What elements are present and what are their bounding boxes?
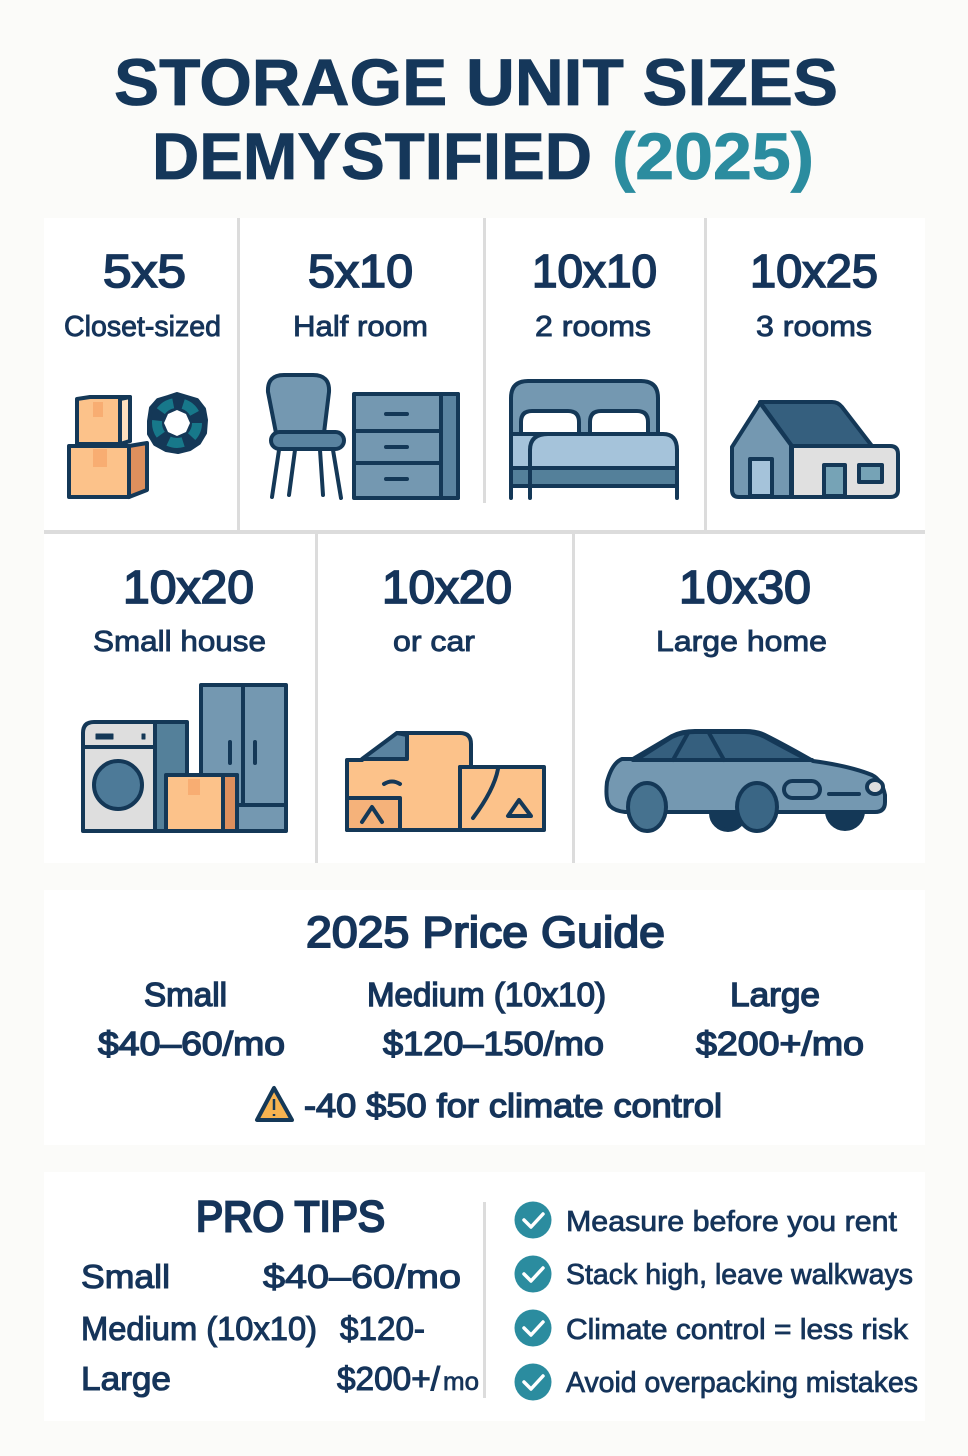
- 10x30 label: [656, 561, 827, 658]
- 10x30 label: 10x30: [679, 561, 811, 613]
- large price: $200+/mo: [696, 1025, 864, 1062]
- 10x10 label: 2 rooms: [535, 311, 651, 343]
- 10x10 label: 10x10: [532, 245, 657, 297]
- small price: [98, 976, 285, 1062]
- icon: car: [606, 731, 885, 831]
- panel: pro tips: [44, 1172, 925, 1421]
- 10x25 label: 3 rooms: [756, 311, 872, 343]
- icon: large boxes: [347, 733, 544, 830]
- tips price table: Small: [81, 1258, 170, 1295]
- icon: bed: [511, 381, 677, 498]
- icon: washer, wardrobe and box: [83, 685, 286, 831]
- 10x20 car label: or car: [393, 626, 475, 658]
- medium price: [367, 976, 606, 1062]
- 10x20 car label: [382, 561, 512, 658]
- tips price table: $200+/: [337, 1360, 441, 1397]
- tips price table: mo: [443, 1368, 479, 1396]
- tips price table: $120-: [340, 1310, 425, 1347]
- icon: boxes and wreath: [69, 394, 206, 497]
- title: (2025): [612, 119, 814, 193]
- 10x20 small house label: 10x20: [123, 561, 254, 613]
- medium price: $120–150/mo: [383, 1025, 604, 1062]
- 5x5 label: 5x5: [103, 245, 186, 297]
- title: [114, 45, 838, 193]
- tips price table: Medium (10x10): [81, 1310, 317, 1347]
- 5x10 label: [293, 245, 428, 343]
- icon: warning: [257, 1088, 292, 1120]
- title: DEMYSTIFIED: [152, 119, 592, 193]
- panel: top row unit sizes: [44, 218, 925, 534]
- tips price table: [81, 1258, 479, 1397]
- 10x25 label: 10x25: [750, 245, 878, 297]
- tip: stack: Stack high, leave walkways: [566, 1259, 913, 1291]
- tip: climate: Climate control = less risk: [566, 1314, 909, 1346]
- tips price table: $40–60/mo: [263, 1258, 461, 1295]
- large price: Large: [730, 976, 820, 1013]
- 5x10 label: Half room: [293, 311, 428, 343]
- medium price: Medium (10x10): [367, 976, 606, 1013]
- small price: $40–60/mo: [98, 1025, 285, 1062]
- panel: 2025 price guide: [44, 890, 925, 1145]
- panel: second row unit sizes: [44, 534, 925, 863]
- tip: overpacking: Avoid overpacking mistakes: [566, 1367, 918, 1399]
- price guide heading: 2025 Price Guide: [306, 908, 665, 957]
- 10x10 label: [532, 245, 657, 343]
- 10x20 car label: 10x20: [382, 561, 512, 613]
- 10x25 label: [750, 245, 878, 343]
- small price: Small: [144, 976, 227, 1013]
- 10x20 small house label: Small house: [93, 626, 266, 658]
- 5x5 label: [64, 245, 221, 343]
- large price: [696, 976, 864, 1062]
- tips price table: Large: [81, 1360, 171, 1397]
- 10x20 small house label: [93, 561, 266, 658]
- tip: measure: Measure before you rent: [566, 1206, 897, 1238]
- 5x5 label: Closet-sized: [64, 311, 221, 343]
- title: STORAGE UNIT SIZES: [114, 45, 838, 119]
- icon: house: [732, 402, 898, 497]
- icon: chair and dresser: [268, 375, 458, 498]
- climate control note: -40 $50 for climate control: [304, 1087, 722, 1124]
- 10x30 label: Large home: [656, 626, 827, 658]
- 5x10 label: 5x10: [308, 245, 413, 297]
- pro tips heading: PRO TIPS: [196, 1193, 385, 1241]
